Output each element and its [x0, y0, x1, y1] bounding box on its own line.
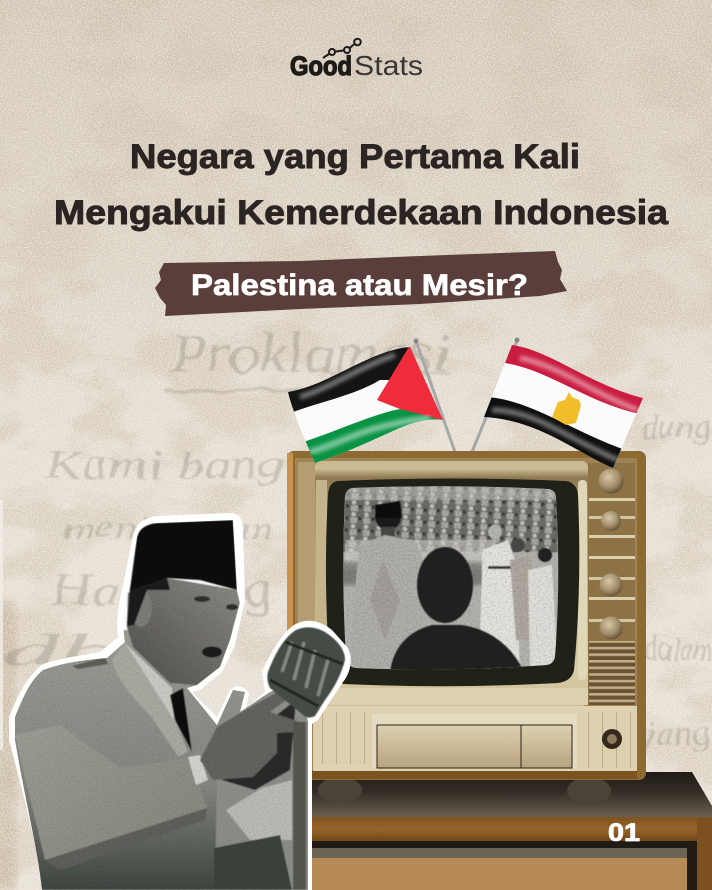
photo: Sukarno speaking with microphone [0, 510, 351, 890]
suit jacket [15, 520, 308, 890]
handwritten proclamation text: Kami bang [44, 442, 285, 487]
tie [170, 688, 192, 752]
logo: GoodStats: Good [290, 51, 352, 81]
jacket chest [112, 642, 188, 756]
logo: GoodStats [290, 39, 423, 81]
handwritten proclamation text: menjatakan [62, 509, 272, 545]
peci hat [130, 520, 237, 590]
flag: Palestine [288, 347, 443, 463]
subtitle banner [155, 251, 567, 316]
flag: Egypt [484, 345, 643, 468]
subtitle banner: Palestina atau Mesir? [191, 269, 528, 302]
tv cabinet [287, 451, 646, 780]
mouth [202, 646, 222, 658]
watch cuff [188, 755, 208, 785]
collar [125, 643, 174, 720]
mic stand [293, 722, 306, 890]
flag poles [414, 338, 520, 452]
handwritten proclamation text: Hal2 jang [51, 564, 272, 615]
title: Negara yang Pertama Kali [130, 138, 580, 176]
tv screen housing [326, 478, 579, 686]
handwritten proclamation text: jang [641, 716, 712, 753]
handwritten proclamation text [0, 323, 712, 753]
cabinet / table [312, 772, 712, 890]
handwritten proclamation text: dh [0, 626, 120, 675]
television [287, 451, 646, 780]
sleeve [15, 725, 207, 860]
tv bezel [315, 461, 588, 706]
hair [127, 578, 170, 626]
hand [200, 686, 300, 780]
tv feet [318, 777, 611, 805]
shoulder epaulette [72, 657, 108, 669]
tv lower control strip [303, 706, 637, 779]
background behind hand [215, 780, 308, 890]
tv side control panel [588, 463, 635, 705]
standing man, back view [352, 501, 425, 672]
eyes and brows [194, 596, 238, 610]
logo: GoodStats: Stats [354, 50, 423, 81]
tv screen photo [340, 484, 562, 674]
handwritten proclamation text: Proklamasi [169, 323, 450, 385]
seated man silhouette [390, 547, 524, 672]
title [54, 138, 669, 232]
handwritten proclamation text: dung [640, 409, 712, 446]
page number: 01 [608, 819, 640, 847]
group on the right [478, 525, 558, 672]
white cutout outline [9, 513, 351, 890]
title: Mengakui Kemerdekaan Indonesia [54, 194, 669, 232]
face [127, 578, 240, 685]
ear [134, 592, 152, 628]
microphone head [267, 627, 345, 718]
egyptian eagle emblem [552, 392, 581, 425]
